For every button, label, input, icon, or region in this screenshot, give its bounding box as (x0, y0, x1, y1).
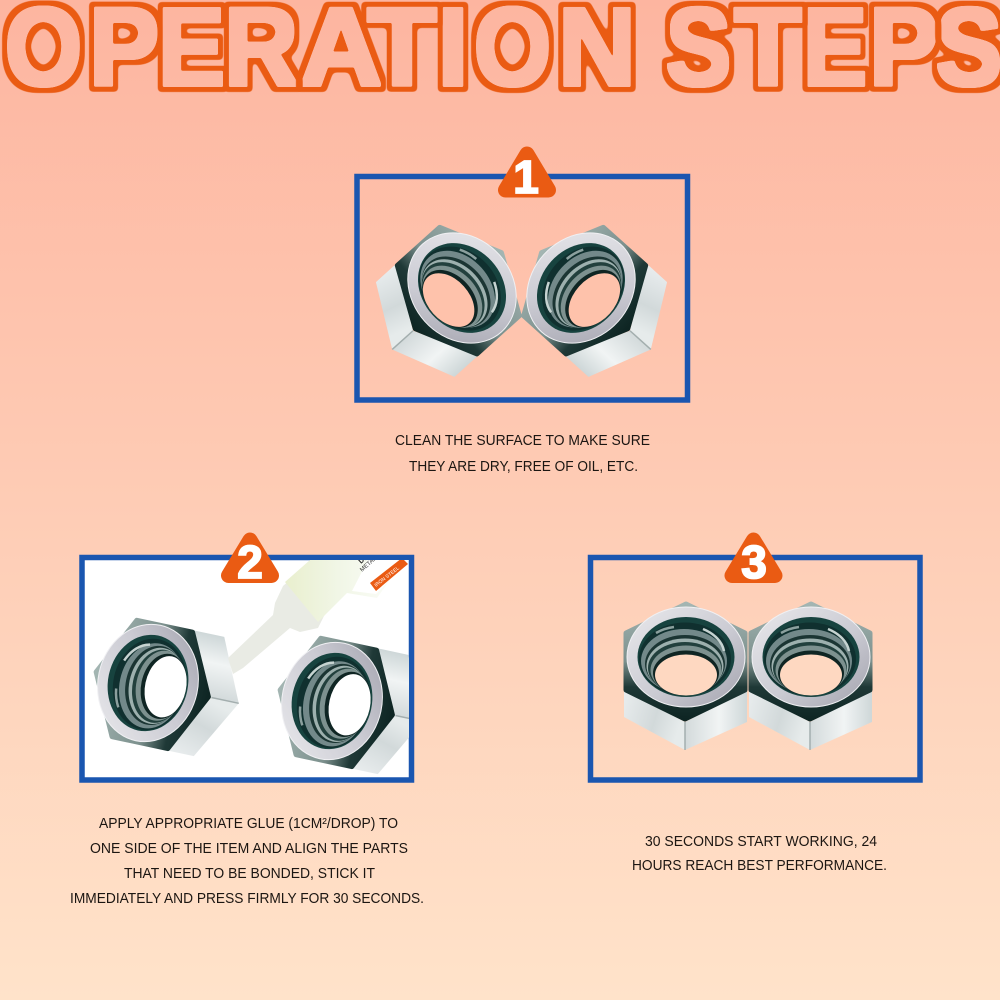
text: step 2 caption: IMMEDIATELY AND PRESS FIRMLY FOR 30 SECONDS. (70, 891, 424, 907)
glue bottle: DI (358, 556, 368, 565)
text: step 3 caption: HOURS REACH BEST PERFORMANCE. (632, 858, 887, 874)
text: step 1 caption: THEY ARE DRY, FREE OF OIL, ETC. (409, 459, 638, 475)
glue bottle: IRON STEEL (374, 565, 401, 589)
panel: step 3 (590, 536, 920, 780)
text: step 2 caption: THAT NEED TO BE BONDED, STICK IT (124, 866, 375, 882)
badge 2: 2 (237, 536, 263, 588)
glue bottle: METAL (359, 555, 378, 573)
glue bottle (228, 555, 409, 674)
text: step 1 caption: CLEAN THE SURFACE TO MAKE SURE (395, 433, 650, 449)
badge 1: 1 (513, 151, 539, 203)
badge 3 (732, 536, 775, 588)
badge 1 (506, 151, 548, 203)
panel: step 1 (351, 151, 692, 400)
text: step 2 caption (70, 816, 424, 907)
image frame 1 (357, 176, 688, 400)
badge 3: 3 (741, 536, 767, 588)
panel: step 2 (82, 536, 436, 781)
text: step 3 caption: 30 SECONDS START WORKING, 24 (645, 834, 877, 850)
text: step 2 caption: APPLY APPROPRIATE GLUE (1CM²/DROP) TO (99, 816, 398, 832)
text: step 2 caption: ONE SIDE OF THE ITEM AND ALIGN THE PARTS (90, 841, 408, 857)
image frame 3 (590, 558, 920, 780)
title (5, 0, 1000, 109)
text: step 1 caption (395, 433, 650, 475)
nut pair, step 1 (351, 206, 692, 396)
badge 2 (228, 536, 272, 588)
nut pair, step 3 (624, 604, 872, 750)
text: step 3 caption (632, 834, 887, 874)
nut pair, step 2 (94, 618, 409, 774)
image frame 2 (82, 558, 412, 780)
